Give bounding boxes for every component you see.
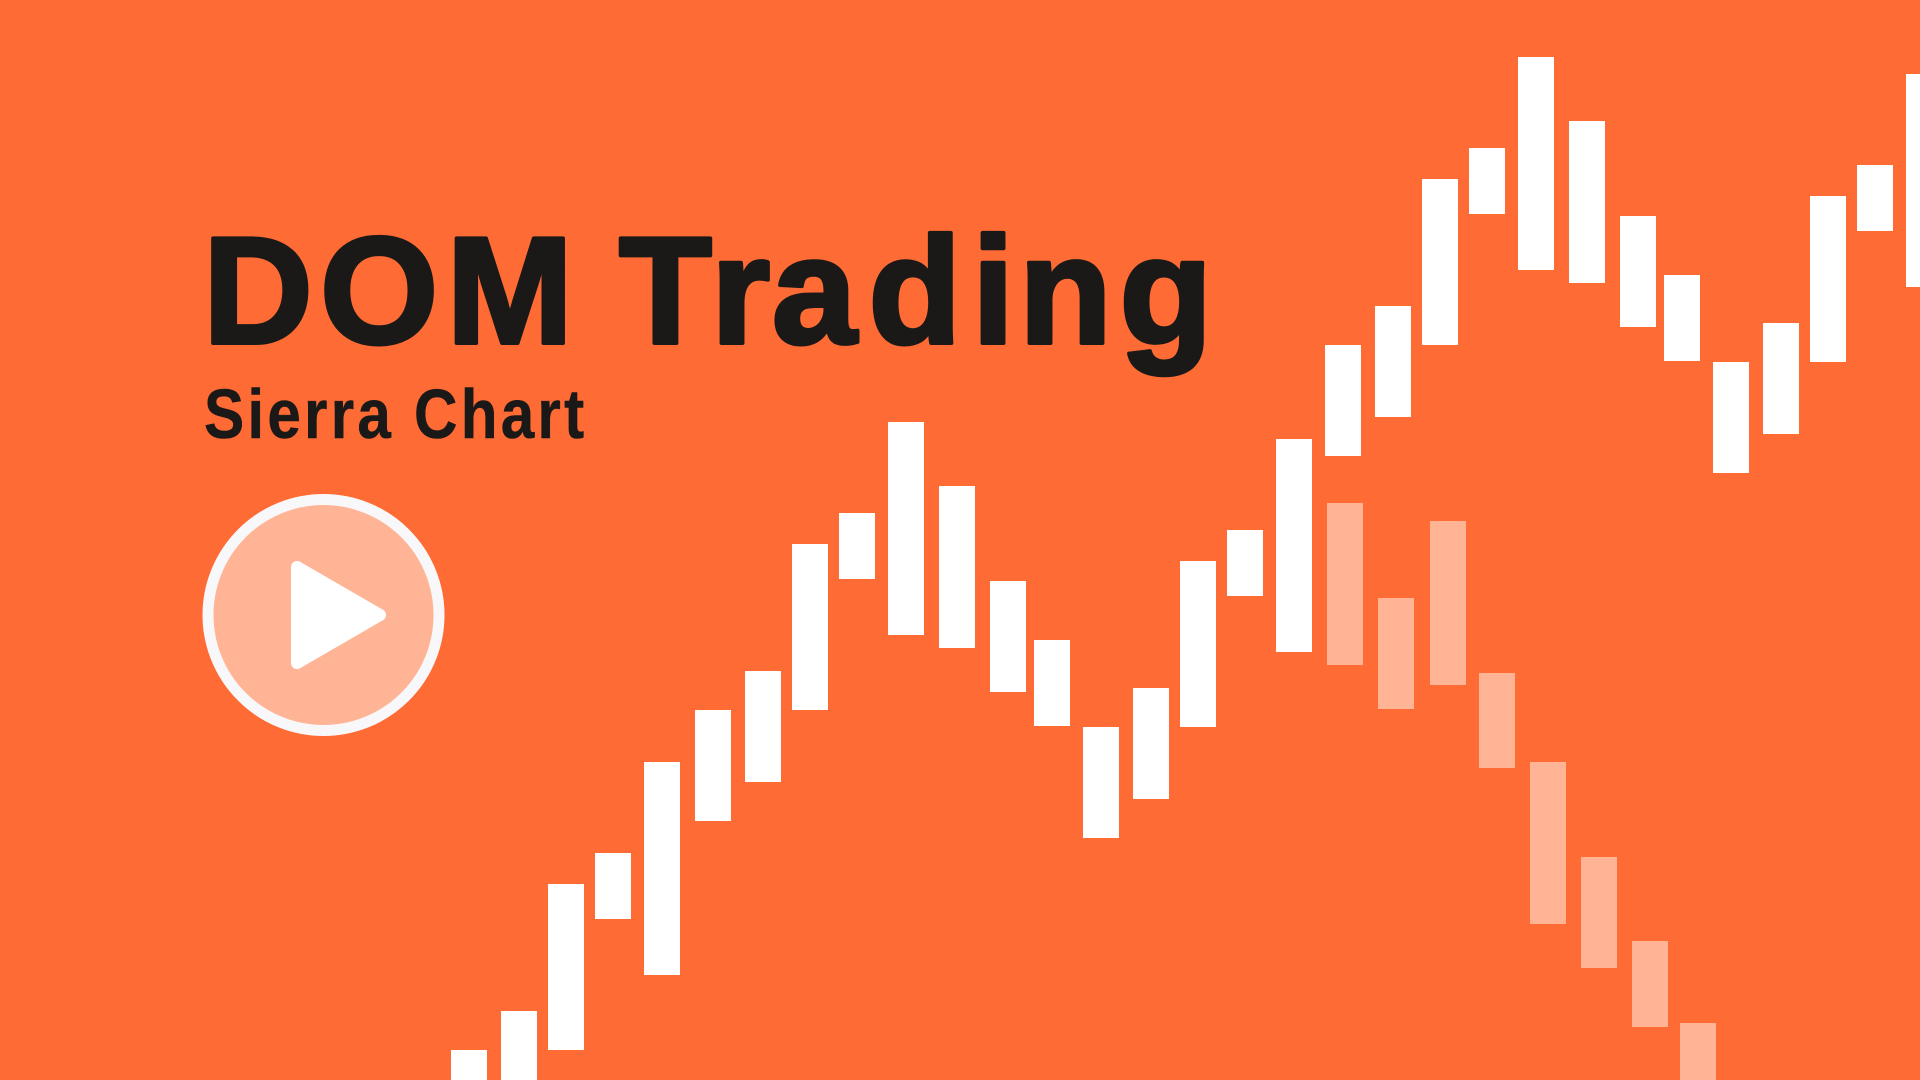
subtitle: Sierra Chart [204,375,584,453]
bar chart: white ascending bars [451,57,1920,1080]
title: DOM Trading [203,206,1212,376]
icon: play button [208,500,439,730]
bar chart: faded descending bars [1327,503,1716,1080]
